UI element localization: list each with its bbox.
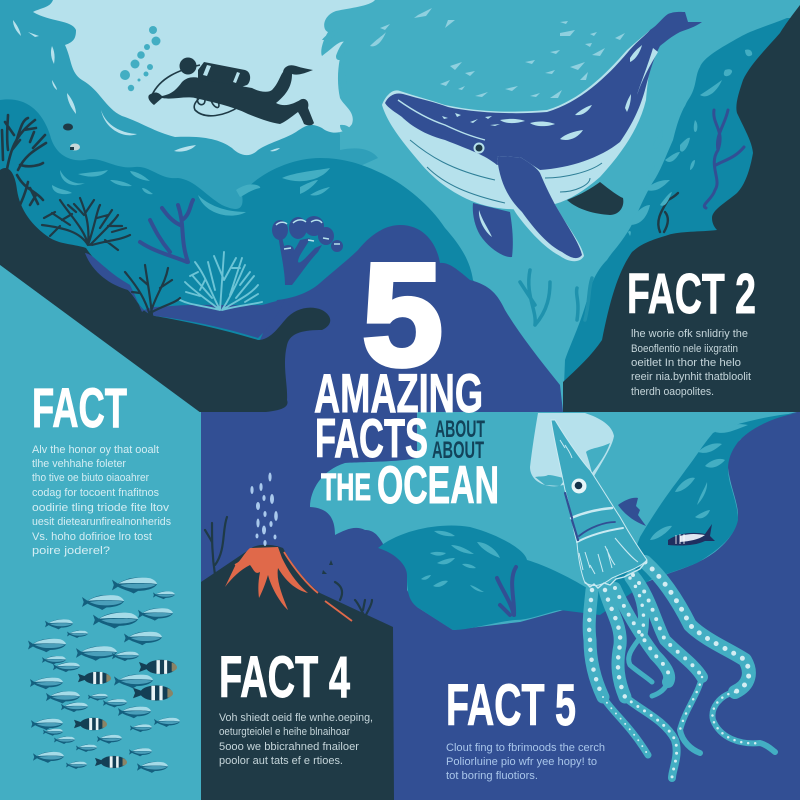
whale throat grooves	[410, 140, 602, 203]
right seabed water mound	[563, 18, 800, 412]
whale mouth line	[398, 100, 485, 140]
heading: fact 5: FACT 5	[446, 673, 576, 738]
icon: fish shoal above whale	[370, 8, 625, 98]
icon: scuba diver	[148, 58, 314, 125]
squid hem	[585, 560, 647, 588]
seagrass: dark sprig	[658, 193, 678, 232]
panel: fact 4 text block	[219, 645, 373, 767]
icon: small reef fish	[63, 124, 80, 150]
volcano bubbles	[250, 472, 278, 546]
body: fact 4: poolor aut tats ef e rtioes.	[219, 755, 343, 767]
body: fact 5: Clout fing to fbrimoods the cerch	[446, 742, 605, 754]
title: the: THE	[321, 467, 371, 509]
panel: coastal reef ledge	[0, 168, 330, 413]
title: numeral 5: 5	[362, 233, 443, 396]
panel: fact 4 dark rock	[201, 545, 394, 800]
body: fact 5: Poliorluine pio wfr yee hopy! to	[446, 756, 597, 768]
body: fact 2: therdh oaopolites.	[631, 386, 714, 398]
body: fact 2: lhe worie ofk snlidriy the	[631, 328, 748, 340]
wave swooshes	[52, 168, 330, 216]
panel: mid water band	[0, 0, 378, 300]
squid collar bands	[565, 493, 623, 542]
title: amazing: AMAZING	[314, 362, 483, 424]
whale back	[385, 12, 702, 170]
body: fact 5	[446, 742, 605, 782]
body: fact 1	[32, 444, 171, 557]
panel: fact 2 dark rock	[563, 5, 800, 412]
icon: left coral	[2, 115, 46, 205]
body: fact 2: oeitlet In thor the helo	[631, 357, 741, 369]
icon: branching dark coral	[42, 198, 130, 250]
title	[314, 233, 499, 515]
icon: small striped fish	[668, 524, 715, 546]
body: fact 1: oodirie tling triode fite ltov	[32, 502, 170, 514]
body: fact 2: reeir nia.bynhit thatbloolit	[631, 371, 751, 383]
volcano dark sea plants	[205, 517, 372, 617]
icon: giant squid	[530, 413, 775, 778]
panel: fact 2 text block	[627, 262, 756, 398]
icon: fish school	[28, 578, 180, 773]
title: about first: ABOUT	[435, 416, 485, 443]
whale flipper navy	[497, 156, 582, 258]
mound leaf marks	[628, 49, 752, 236]
whale skin spots	[442, 45, 642, 140]
icon: humpback whale	[382, 12, 702, 261]
body: fact 4: 5ooo we bbicrahned fnailoer	[219, 741, 359, 753]
body: fact 1: uesit dietearunfirealnonherids	[32, 516, 171, 528]
fish shoal marks in lower mound	[421, 424, 748, 592]
panel: teal title band	[310, 412, 797, 630]
whale belly	[382, 30, 658, 209]
lower deep water mound	[378, 413, 797, 630]
coral reef base navy	[85, 253, 285, 338]
volcano lava flows	[225, 547, 308, 610]
whale flipper highlight	[479, 210, 492, 237]
teal splash marks on surface	[322, 28, 352, 133]
seagrass: right mound	[704, 110, 744, 208]
lower right navy field	[200, 412, 800, 800]
squid mantle	[551, 420, 647, 585]
panel: sunlit surface water	[33, 0, 375, 155]
squid fin membrane	[530, 413, 614, 486]
squid tentacle suckers	[589, 562, 760, 778]
body: fact 4: Voh shiedt oeid fle wnhe.oeping,	[219, 712, 373, 724]
squid body strokes	[560, 440, 638, 574]
icon: navy tree with pods	[272, 216, 343, 285]
lava rivulets	[235, 552, 352, 621]
heading: fact 1: FACT	[32, 376, 127, 439]
body: fact 1: Alv the honor oy that ooalt	[32, 444, 159, 456]
body: fact 1: tlhe vehhahe foleter	[32, 458, 126, 470]
whale rear flipper	[473, 203, 513, 257]
squid side fin	[618, 498, 646, 526]
squid eye	[572, 478, 586, 494]
body: fact 4: oeturgteiolel e heihe blnaihoar	[219, 726, 350, 738]
panel: deep water band	[0, 99, 500, 400]
pale current marks	[13, 20, 280, 152]
bottom left teal panel edge	[0, 412, 201, 800]
diagonal teal panel	[0, 265, 201, 413]
body: fact 5: tot boring fluotiors.	[446, 770, 538, 782]
body: fact 1: codag for tocoent fnafitnos	[32, 487, 159, 499]
body: fact 1: tho tive oe biuto oiaoahrer	[32, 472, 149, 484]
body: fact 2: Boeoflentio nele iixgratin	[631, 343, 738, 355]
body: fact 1: poire joderel?	[32, 545, 110, 557]
whale main flipper	[497, 156, 584, 261]
icon: volcano	[205, 472, 372, 621]
body: fact 4	[219, 712, 373, 767]
body: fact 2	[631, 328, 751, 398]
heading: fact 4: FACT 4	[219, 645, 350, 710]
body: fact 1: Vs. hoho dofirioe lro tost	[32, 531, 152, 543]
icon: diver bubbles	[120, 26, 160, 91]
squid tentacles	[589, 562, 775, 778]
whale tail highlight	[637, 48, 658, 95]
panel: fact 1 text block	[32, 376, 171, 557]
title: about second: ABOUT	[432, 437, 484, 464]
whale eye	[474, 142, 484, 154]
dark rock behind whale	[567, 182, 623, 215]
panel: central navy blob	[200, 225, 563, 412]
icon: dark small coral	[125, 265, 180, 315]
decorative light swooshes	[52, 168, 330, 216]
dark seagrass in mound	[497, 567, 516, 615]
icon: navy coral	[140, 200, 193, 262]
squid membrane shadows	[535, 443, 610, 486]
panel: fact 5 text block	[446, 673, 605, 782]
title: ocean: OCEAN	[377, 456, 499, 515]
title: facts: FACTS	[315, 407, 428, 469]
seagrass: below whale	[520, 270, 592, 325]
icon: pale branching coral	[180, 252, 262, 310]
